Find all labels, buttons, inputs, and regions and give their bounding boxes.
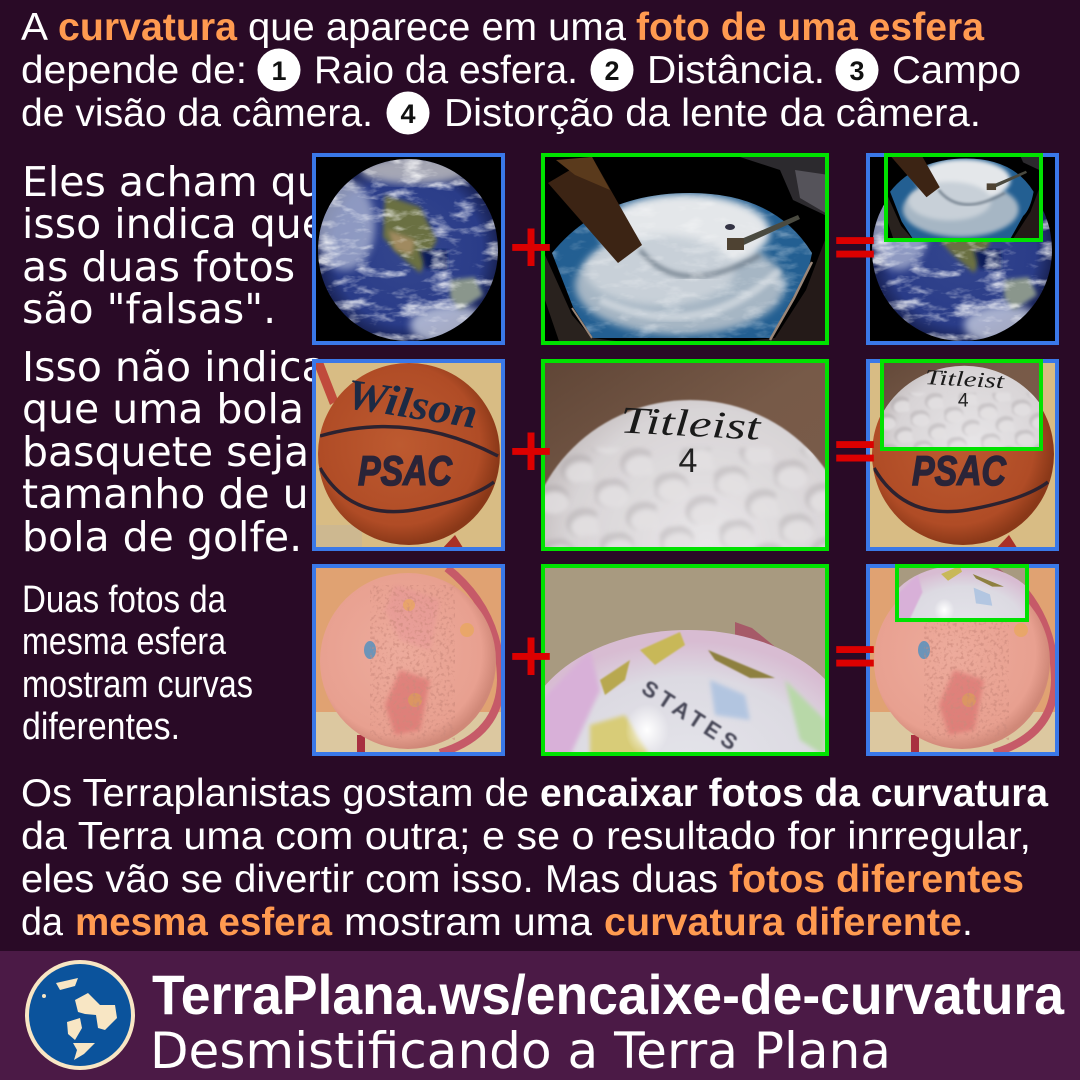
equals sign row 3: = (830, 620, 880, 690)
paragraph: flat earthers fit curvature photos: encaixar fotos da curvatura (540, 772, 1048, 815)
heading: curvature depends on four factors: 2 (604, 56, 620, 86)
photo: basketball with golf ball overlay (866, 343, 1059, 551)
inset: golf ball photo: 4 (958, 390, 969, 411)
text block: they think the photos are fake: são "falsas". (22, 285, 276, 333)
heading: curvature depends on four factors: depende de: (21, 49, 247, 92)
heading: curvature depends on four factors: 4 (400, 99, 416, 129)
photo: basketball: Wilson (343, 371, 481, 438)
heading: curvature depends on four factors: Distorção da lente da câmera. (444, 92, 981, 135)
photo: globe with close-up overlay (866, 564, 1059, 756)
heading: curvature depends on four factors: Raio da esfera. (314, 49, 578, 92)
text block: two photos of the same sphere: Duas fotos da (22, 579, 227, 621)
text block: they think the photos are fake: as duas fotos (22, 243, 295, 291)
photo: Earth with hurricane overlay (866, 136, 1059, 345)
heading: curvature depends on four factors: 1 (271, 56, 287, 86)
heading: curvature depends on four factors: A (21, 6, 48, 49)
heading: curvature depends on four factors: Distância. (647, 49, 825, 92)
photo: golf ball: 4 (679, 442, 697, 480)
icon: flat earth logo (25, 960, 135, 1070)
text block: basketball is not golf ball sized: que uma bola de (22, 385, 368, 433)
paragraph: flat earthers fit curvature photos: fotos diferentes (729, 858, 1024, 901)
text block: two photos of the same sphere: mostram curvas (22, 664, 253, 706)
photo: globe close-up: STATES (637, 675, 746, 758)
photo: golf ball (541, 359, 829, 551)
photo: basketball: PSAC (358, 447, 453, 494)
text block: they think the photos are fake: Eles acham que (22, 158, 348, 206)
heading: curvature depends on four factors: foto de uma esfera (636, 6, 984, 49)
paragraph: flat earthers fit curvature photos: Os Terraplanistas gostam de (21, 772, 529, 815)
paragraph: flat earthers fit curvature photos: da (21, 901, 63, 944)
heading: curvature depends on four factors: de visão da câmera. (21, 92, 373, 135)
text block: they think the photos are fake (22, 158, 348, 333)
paragraph: flat earthers fit curvature photos: mostram uma (344, 901, 592, 944)
footer title URL: TerraPlana.ws/encaixe-de-curvatura (152, 963, 1065, 1026)
plus sign row 1: + (506, 211, 556, 281)
text block: basketball is not golf ball sized: basquete seja do (22, 428, 373, 476)
photo: hurricane from the space station (541, 153, 829, 345)
text block: basketball is not golf ball sized (22, 343, 374, 561)
heading: curvature depends on four factors: Campo (892, 49, 1021, 92)
text block: basketball is not golf ball sized: tamanho de uma (22, 470, 374, 518)
text block: they think the photos are fake: isso indica que (22, 200, 327, 248)
photo: Earth from afar (312, 153, 505, 345)
text block: two photos of the same sphere: diferentes. (22, 706, 180, 748)
inset: globe close-up photo (895, 564, 1029, 622)
plus sign row 3: + (506, 620, 556, 690)
paragraph: flat earthers fit curvature photos: curvatura diferente (604, 901, 962, 944)
equals sign row 1: = (830, 211, 880, 281)
text block: basketball is not golf ball sized: bola de golfe. (22, 513, 302, 561)
photo: basketball with golf ball overlay: PSAC (912, 447, 1007, 494)
heading: curvature depends on four factors: 3 (849, 56, 865, 86)
text block: basketball is not golf ball sized: Isso não indica (22, 343, 327, 391)
paragraph: flat earthers fit curvature photos: da Terra uma com outra; e se o resultado for inrregular, (21, 815, 1031, 858)
paragraph: flat earthers fit curvature photos (21, 772, 1048, 944)
inset: hurricane photo (884, 153, 1043, 242)
heading: curvature depends on four factors: curvatura (58, 6, 237, 49)
paragraph: flat earthers fit curvature photos: . (962, 901, 973, 944)
photo: globe close-up (541, 564, 829, 756)
footer subtitle: Desmistificando a Terra Plana (150, 1022, 891, 1080)
plus sign row 2: + (506, 415, 556, 485)
heading: curvature depends on four factors (21, 6, 1021, 135)
equals sign row 2: = (830, 415, 880, 485)
text block: two photos of the same sphere (22, 579, 253, 748)
heading: curvature depends on four factors: que aparece em uma (248, 6, 626, 49)
photo: basketball (312, 359, 505, 551)
text block: two photos of the same sphere: mesma esfera (22, 621, 227, 663)
photo: golf ball: Titleist (619, 399, 763, 449)
inset: golf ball photo: Titleist (924, 365, 1006, 393)
inset: golf ball photo (880, 359, 1043, 451)
footer band (0, 951, 1080, 1080)
paragraph: flat earthers fit curvature photos: mesma esfera (75, 901, 332, 944)
paragraph: flat earthers fit curvature photos: eles vão se divertir com isso. Mas duas (21, 858, 718, 901)
photo: desk globe (312, 564, 505, 756)
